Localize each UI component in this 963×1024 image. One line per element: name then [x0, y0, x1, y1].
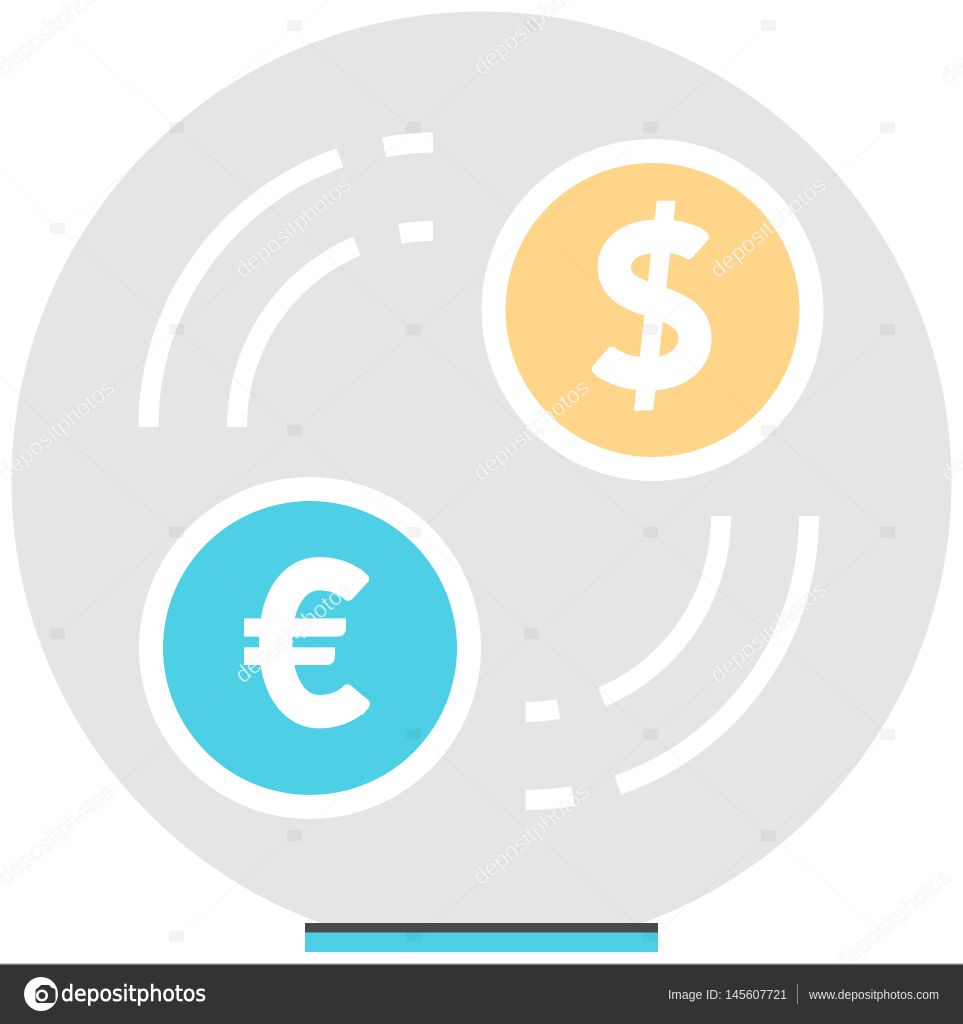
icon: depositphotos camera logo [24, 977, 58, 1011]
icon: dollar sign [590, 201, 711, 411]
logo wordmark: depositphotos [61, 982, 206, 1007]
icon: euro sign [244, 566, 372, 717]
watermark text: depositphotos [705, 171, 831, 283]
watermark text: depositphotos [830, 863, 956, 975]
watermark text: depositphotos [230, 576, 356, 688]
footer bar [0, 963, 963, 1024]
watermark text: depositphotos [230, 171, 356, 283]
exchange arcs: top left [148, 142, 433, 427]
base bar [305, 923, 658, 952]
watermark text: depositphotos [468, 374, 594, 486]
watermark text: depositphotos [705, 576, 831, 688]
website url: www.depositphotos.com [808, 988, 939, 1002]
image id: Image ID: 145607721 [668, 988, 787, 1002]
dollar coin [482, 139, 824, 481]
exchange arcs: bottom right [526, 516, 809, 800]
euro coin [139, 477, 481, 819]
watermark text: depositphotos [468, 778, 594, 890]
